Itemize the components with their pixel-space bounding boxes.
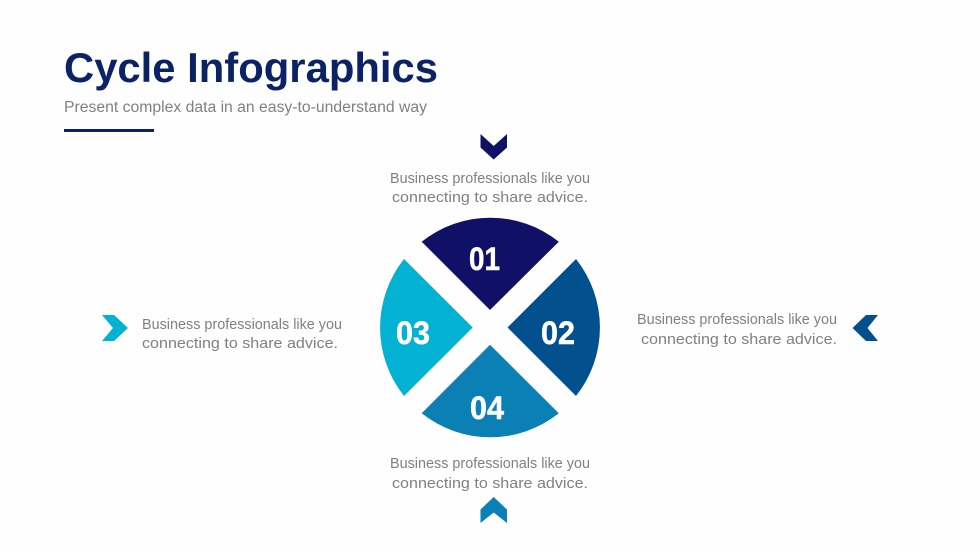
text block: left: Business professionals like you bbox=[142, 316, 342, 333]
text block: top: connecting to share advice. bbox=[392, 189, 588, 206]
text block: right: Business professionals like you bbox=[637, 311, 837, 328]
subtitle: Present complex data in an easy-to-understand way bbox=[64, 99, 427, 116]
segment 02: 02 bbox=[541, 315, 575, 351]
text block: bottom: Business professionals like you bbox=[390, 455, 590, 472]
segment 04 bbox=[422, 345, 559, 437]
icon: top chevron bbox=[480, 134, 507, 160]
text block: right: connecting to share advice. bbox=[641, 331, 837, 348]
text block: top: Business professionals like you bbox=[390, 170, 590, 187]
title underline bbox=[64, 129, 154, 132]
cycle diagram bbox=[380, 218, 600, 437]
text block: bottom bbox=[390, 455, 590, 492]
segment 03: 03 bbox=[396, 315, 430, 351]
icon: bottom chevron bbox=[480, 497, 507, 523]
text block: bottom: connecting to share advice. bbox=[392, 475, 588, 492]
segment 01 bbox=[422, 218, 559, 310]
icon: left chevron bbox=[102, 315, 128, 341]
text block: left: connecting to share advice. bbox=[142, 335, 338, 352]
text block: right bbox=[637, 311, 837, 348]
title: Cycle Infographics bbox=[64, 44, 438, 91]
icon: right chevron bbox=[852, 315, 878, 341]
text block: left bbox=[142, 316, 342, 352]
segment 01: 01 bbox=[469, 241, 500, 277]
segment 03 bbox=[380, 259, 473, 396]
segment 04: 04 bbox=[470, 390, 504, 426]
text block: top bbox=[390, 170, 590, 206]
segment 02 bbox=[508, 259, 600, 396]
